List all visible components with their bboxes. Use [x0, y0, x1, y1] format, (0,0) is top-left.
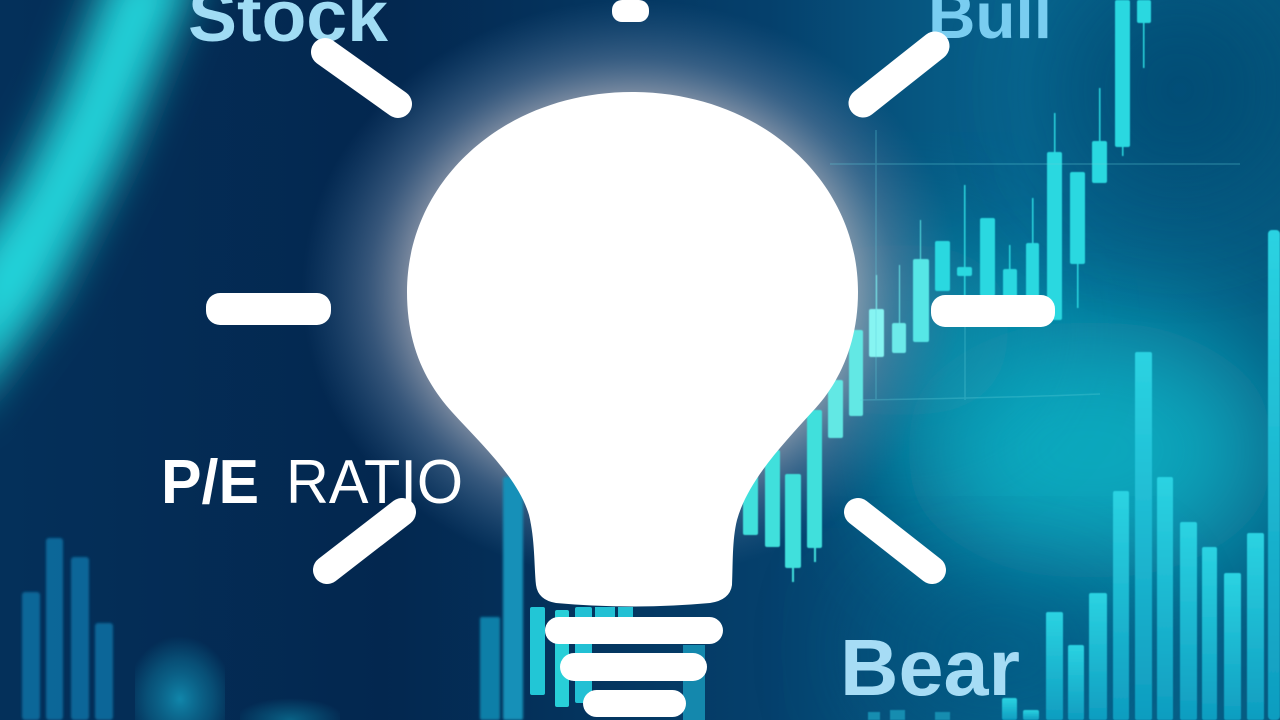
ray: top right: [863, 46, 935, 103]
candlesticks near bulb: [743, 220, 929, 582]
heading: Bear: Bear: [840, 623, 1020, 712]
screw base ring 3: [583, 690, 686, 717]
ray: right: [931, 295, 1055, 327]
ray: left: [206, 293, 331, 325]
bar chart: bottom centre: [480, 477, 705, 720]
screw base ring 2: [560, 653, 707, 681]
bar chart: bottom right: [868, 230, 1280, 720]
blurred bar chart: left: [22, 538, 113, 720]
candlestick chart: [743, 0, 1151, 582]
icon: light bulb: [407, 92, 858, 717]
label: P/E ratio: RATIO: [286, 448, 463, 517]
bulb glow: [302, 0, 962, 580]
rising candlesticks: [935, 0, 1151, 320]
bulb glass: [407, 92, 858, 606]
grid lines: [830, 130, 1240, 400]
ray: lower right: [858, 512, 932, 570]
ray: lower left: [327, 512, 402, 570]
screw base ring 1: [545, 617, 723, 644]
ray: top: [612, 0, 649, 22]
ray: top left: [325, 52, 398, 104]
label: P/E ratio: P/E: [161, 448, 259, 517]
light rays: [206, 0, 1055, 570]
